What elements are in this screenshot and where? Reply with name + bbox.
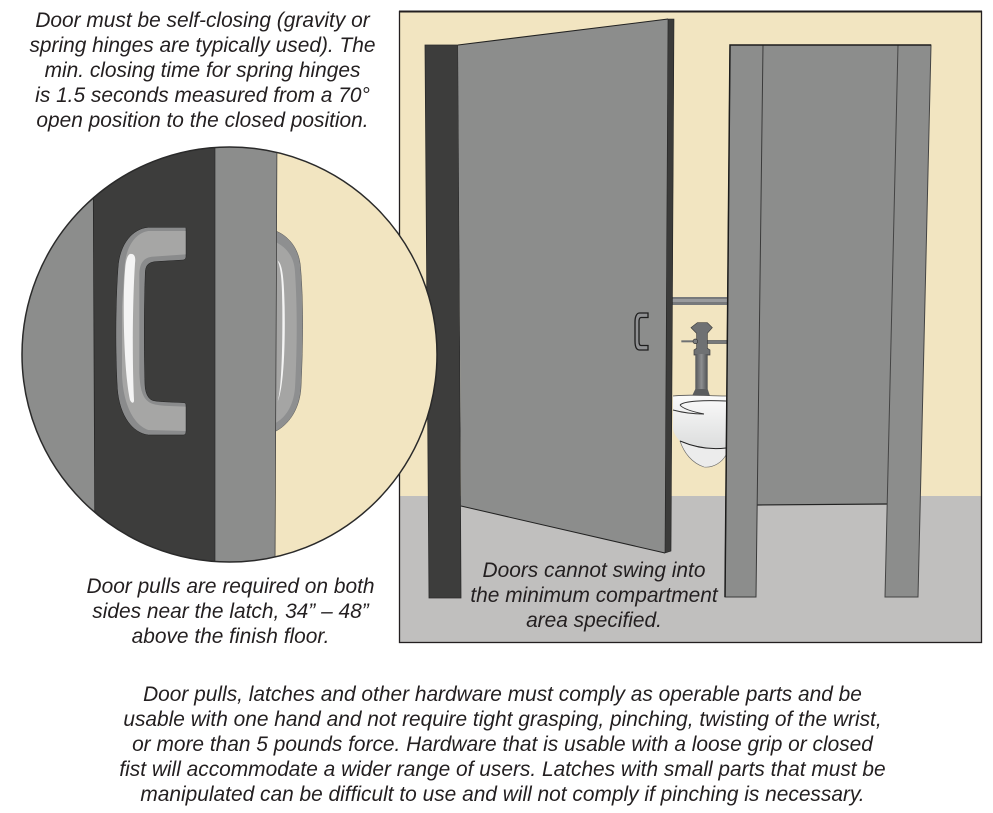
icon: toilet [673, 395, 726, 467]
icon: flush valve [681, 323, 727, 396]
frame [399, 12, 982, 642]
lens outline [22, 147, 437, 562]
text: swing note: the minimum compartment [470, 584, 719, 607]
icon: door pull [635, 313, 648, 350]
text: swing note: area specified. [526, 609, 662, 632]
text: door pulls note: sides near the latch, 34” – 48” [92, 600, 370, 623]
text: door pulls note: Door pulls are required on both [86, 575, 375, 598]
icon: door pull enlarged [116, 227, 186, 435]
text: hardware note: fist will accommodate a wider range of users. Latches with small parts that must be [119, 758, 886, 781]
door edge in lens [215, 140, 277, 570]
text: swing note [470, 559, 719, 632]
door edge [665, 19, 674, 553]
text: self-closing note: Door must be self-closing (gravity or [35, 9, 371, 32]
panel: compartment scene [399, 12, 982, 642]
door [458, 19, 674, 553]
text: self-closing note: spring hinges are typically used). The [29, 34, 376, 57]
right partition: panel [725, 45, 931, 597]
text: door pulls note: above the finish floor. [132, 625, 329, 648]
grab bar [670, 297, 732, 305]
text: hardware note: or more than 5 pounds force. Hardware that is usable with a loose grip or closed [132, 733, 874, 756]
panel: magnified door pull [20, 140, 440, 570]
text: self-closing note: is 1.5 seconds measured from a 70° [35, 84, 370, 107]
text: self-closing note [29, 9, 376, 132]
text: hardware note: Door pulls, latches and other hardware must comply as operable parts and be [143, 683, 862, 706]
floor [400, 496, 981, 642]
text: hardware note: manipulated can be difficult to use and will not comply if pinching is necessary. [140, 783, 865, 806]
text: hardware note [119, 683, 886, 806]
icon: pull seen from far side [275, 231, 303, 432]
text: door pulls note [86, 575, 375, 648]
text: swing note: Doors cannot swing into [483, 559, 705, 582]
right partition: left pilaster [725, 45, 763, 597]
left pilaster [425, 45, 461, 598]
right partition: right pilaster [885, 45, 931, 597]
text: self-closing note: open position to the closed position. [36, 109, 369, 132]
wall [400, 12, 981, 497]
text: hardware note: usable with one hand and not require tight grasping, pinching, twisting of the wrist, [123, 708, 882, 731]
text: self-closing note: min. closing time for spring hinges [45, 59, 361, 82]
door face in lens [22, 199, 94, 511]
wall in lens [275, 153, 436, 556]
right partition: top and outer edges [725, 45, 931, 597]
pilaster in lens [93, 140, 215, 570]
